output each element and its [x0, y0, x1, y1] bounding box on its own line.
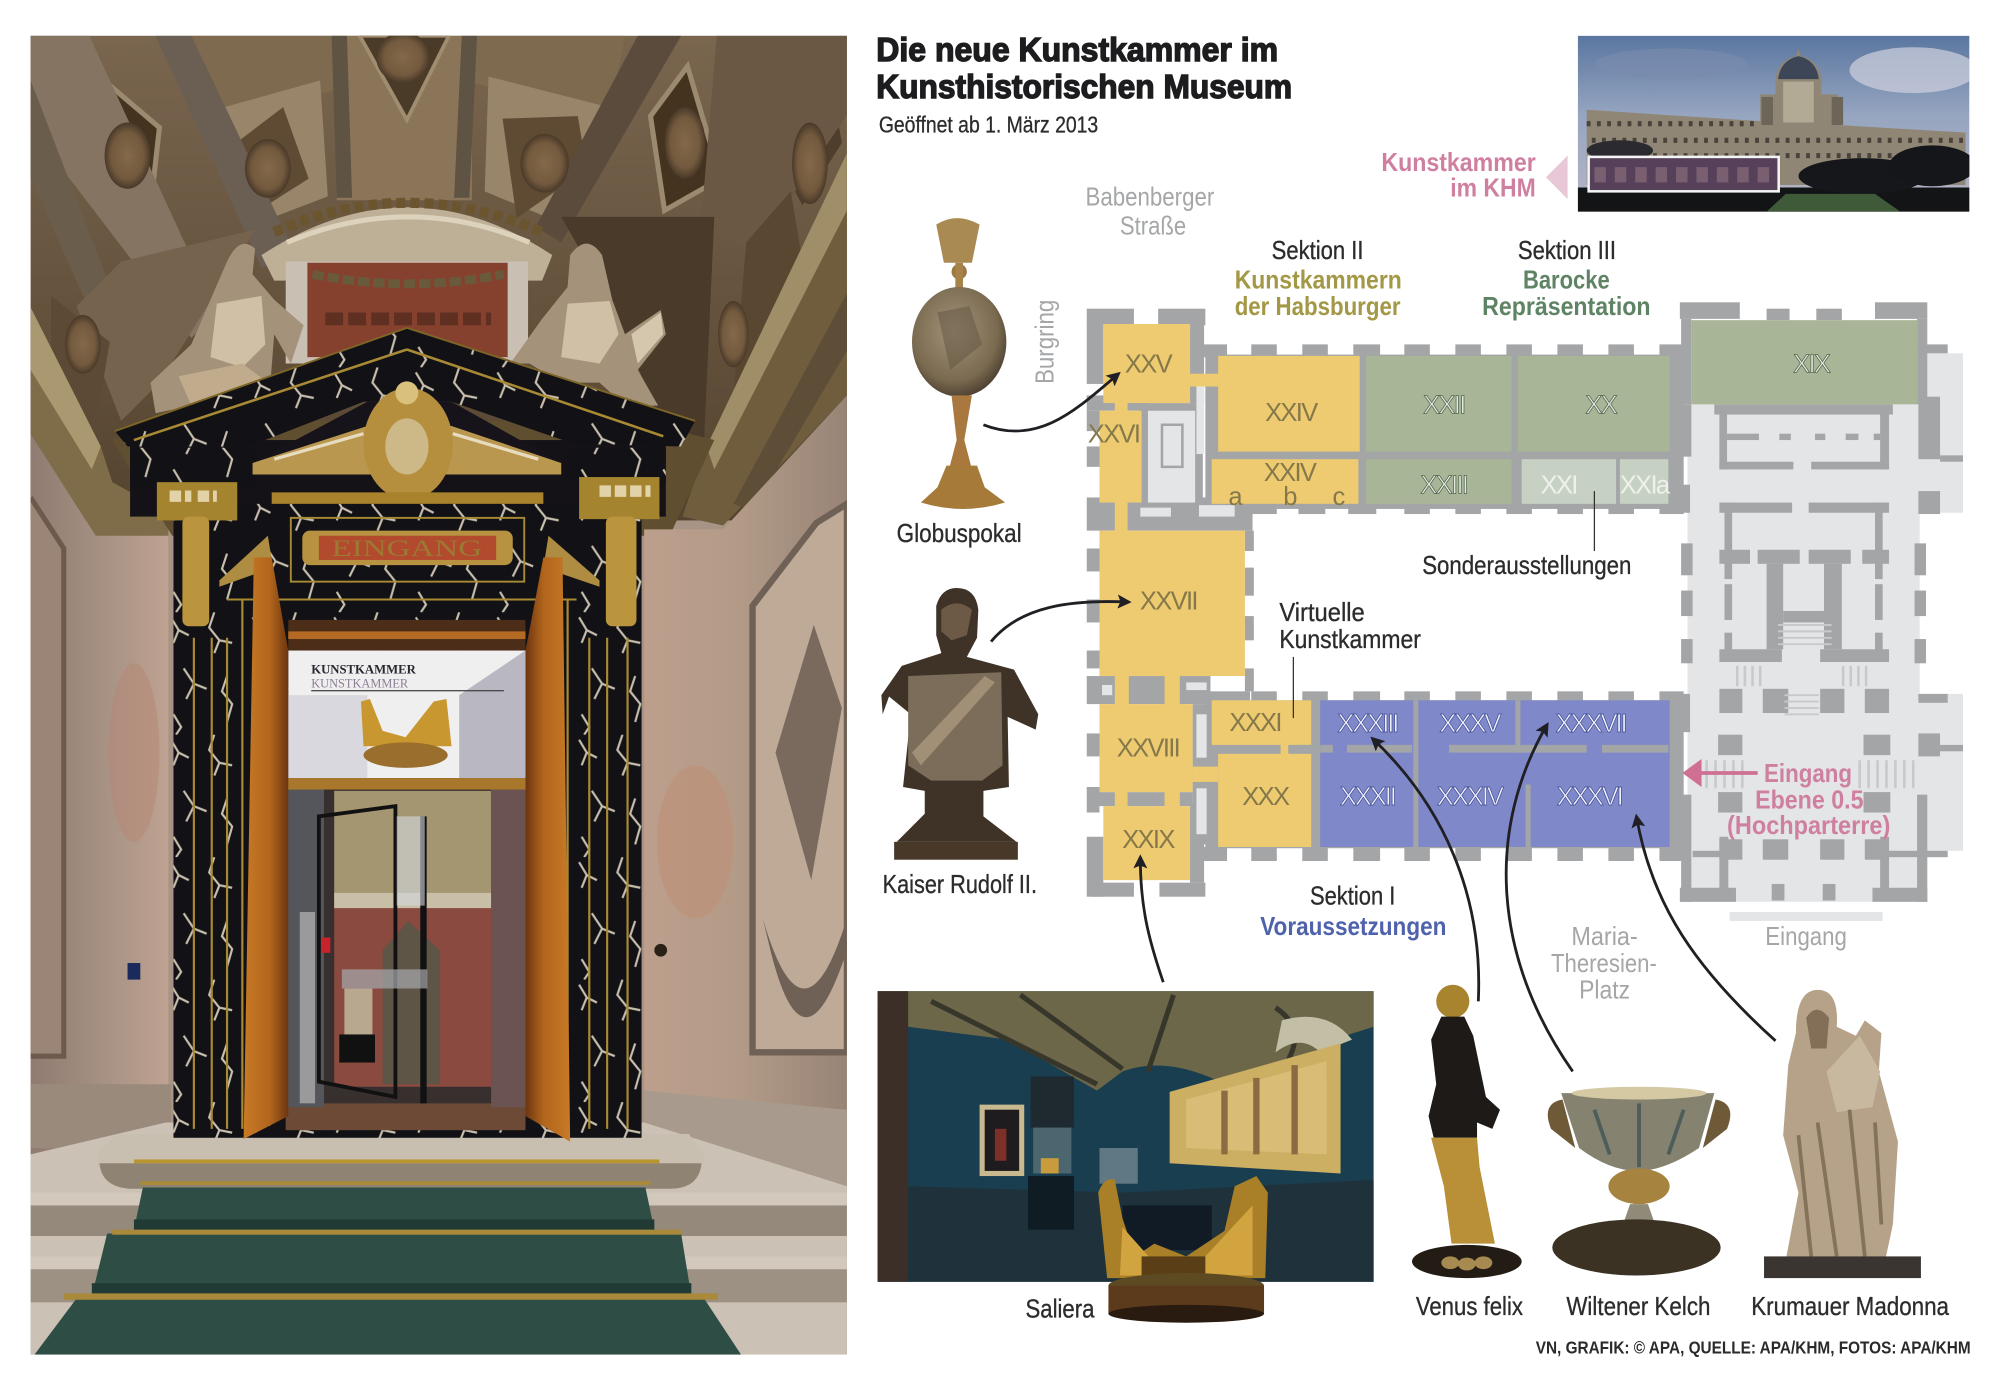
doorway interior [286, 620, 526, 1130]
room numbers: a [1228, 483, 1243, 511]
room numbers: XXXI [1229, 709, 1281, 737]
label: Kunstkammer im KHM [1381, 149, 1536, 202]
labels: Maria-Theresien-Platz and Eingang: Maria- [1571, 923, 1638, 951]
EINGANG plaque [302, 531, 513, 565]
cornice bands [31, 153, 847, 540]
room numbers: XXIV [1264, 459, 1317, 487]
exhibition sign: KUNSTKAMMER [311, 677, 409, 691]
room numbers: XX [1585, 391, 1618, 419]
street labels: Burgring [1032, 300, 1060, 384]
section labels: Voraussetzungen [1260, 913, 1446, 941]
title: Die neue Kunstkammer im [876, 32, 1278, 69]
room numbers: XXI [1541, 472, 1577, 500]
photo: museum exterior [1578, 36, 1977, 212]
section labels: der Habsburger [1235, 293, 1401, 321]
floor and stairs [31, 1122, 847, 1355]
object: Wiltener Kelch [1548, 1087, 1730, 1276]
floor plan [1087, 302, 1963, 921]
special exhibition rooms [1522, 459, 1668, 504]
street labels: Babenberger [1085, 183, 1215, 211]
section labels: Kunstkammern [1235, 266, 1402, 294]
room numbers [1088, 350, 1831, 854]
room numbers: XXVI [1088, 421, 1139, 449]
section labels: Barocke [1523, 266, 1610, 294]
exhibition sign [286, 651, 526, 790]
label: Virtuelle Kunstkammer with leader line [1279, 599, 1421, 718]
room numbers: XXXIV [1437, 783, 1504, 811]
arrows from objects to rooms [983, 374, 1776, 1071]
stairwell and light service areas [1102, 378, 1235, 834]
label: Wiltener Kelch: Wiltener Kelch [1566, 1293, 1710, 1321]
object: bust of Kaiser Rudolf II [881, 588, 1038, 860]
light grey east block [1668, 302, 1963, 921]
section labels: Repräsentation [1482, 293, 1651, 321]
black marble pediment and portal [115, 328, 695, 1138]
subtitle: Geöffnet ab 1. März 2013 [879, 112, 1098, 138]
purple rooms: Sektion I [1296, 700, 1670, 847]
room numbers: XXIV [1265, 399, 1318, 427]
vaulted ceiling [31, 32, 847, 520]
label: Saliera: Saliera [1026, 1296, 1095, 1324]
title [876, 32, 1292, 106]
label: Sonderausstellungen with leader line: Sonderausstellungen [1422, 552, 1631, 580]
labels: Maria-Theresien-Platz and Eingang [1551, 923, 1847, 1005]
label: Kunstkammer im KHM: Kunstkammer [1381, 149, 1536, 177]
label: pink entrance with arrow [1682, 759, 1890, 840]
room numbers: XXXIII [1337, 710, 1397, 738]
label: Venus felix: Venus felix [1416, 1293, 1523, 1321]
label: Globuspokal: Globuspokal [897, 520, 1022, 548]
label: Virtuelle Kunstkammer with leader line: Virtuelle [1279, 599, 1365, 627]
highlighted Kunstkammer area in photo [1589, 157, 1779, 191]
room numbers: XXIII [1420, 472, 1467, 500]
street labels [1032, 183, 1215, 384]
room numbers: XXX [1242, 783, 1290, 811]
section labels: Sektion III [1518, 237, 1616, 265]
room numbers: c [1332, 483, 1345, 511]
labels: Maria-Theresien-Platz and Eingang: Theresien- [1551, 950, 1657, 978]
room numbers: XXV [1125, 350, 1173, 378]
stair outline [1162, 425, 1182, 467]
yellow rooms: Sektion II [1099, 324, 1360, 880]
photo: Kunstkammer entrance portal [31, 32, 847, 1355]
EINGANG plaque: EINGANG [332, 536, 482, 561]
labels: Maria-Theresien-Platz and Eingang: Platz [1579, 977, 1630, 1005]
room numbers: XXIa [1620, 472, 1671, 500]
room numbers: XXXV [1439, 710, 1501, 738]
green carpet and brass rods [34, 1181, 741, 1355]
room numbers: XXVIII [1117, 734, 1179, 762]
green rooms: Sektion III [1366, 320, 1917, 504]
west wing grey walls [1087, 309, 1684, 897]
exhibition sign: KUNSTKAMMER [311, 662, 417, 676]
label: pink entrance with arrow: Eingang [1764, 760, 1852, 788]
section labels [1235, 237, 1651, 941]
room numbers: XXXII [1340, 783, 1395, 811]
object: Venus felix [1412, 985, 1522, 1278]
room numbers: XXVII [1140, 588, 1197, 616]
room numbers: XXII [1423, 391, 1465, 419]
street labels: Straße [1120, 213, 1186, 241]
section labels: Sektion II [1272, 237, 1364, 265]
object: Globuspokal [912, 218, 1006, 509]
room numbers: XXXVI [1557, 783, 1622, 811]
label: Kunstkammer im KHM: im KHM [1450, 174, 1536, 202]
label: Krumauer Madonna: Krumauer Madonna [1751, 1293, 1950, 1321]
object: Saliera [1098, 1176, 1268, 1323]
label: pink entrance with arrow: Ebene 0.5 [1755, 787, 1864, 815]
label: Kaiser Rudolf II.: Kaiser Rudolf II. [883, 871, 1037, 899]
label: pink entrance with arrow: (Hochparterre) [1727, 812, 1890, 840]
room numbers: b [1283, 483, 1297, 511]
object: Krumauer Madonna [1764, 990, 1921, 1278]
open wooden doors [244, 557, 570, 1142]
photo: gallery room [878, 991, 1374, 1282]
room numbers: XXXVII [1556, 710, 1626, 738]
room numbers: XXIX [1122, 826, 1175, 854]
gold portal ornaments [157, 381, 659, 1129]
arrow: pink pointer to photo [1546, 156, 1568, 199]
side walls [31, 395, 847, 1186]
title: Kunsthistorischen Museum [876, 69, 1292, 106]
section labels: Sektion I [1310, 882, 1395, 910]
room numbers: XIX [1793, 350, 1831, 378]
labels: Maria-Theresien-Platz and Eingang: Eingang [1765, 923, 1847, 951]
label: Virtuelle Kunstkammer with leader line: Kunstkammer [1279, 626, 1421, 654]
statues and red plaque [151, 203, 666, 413]
